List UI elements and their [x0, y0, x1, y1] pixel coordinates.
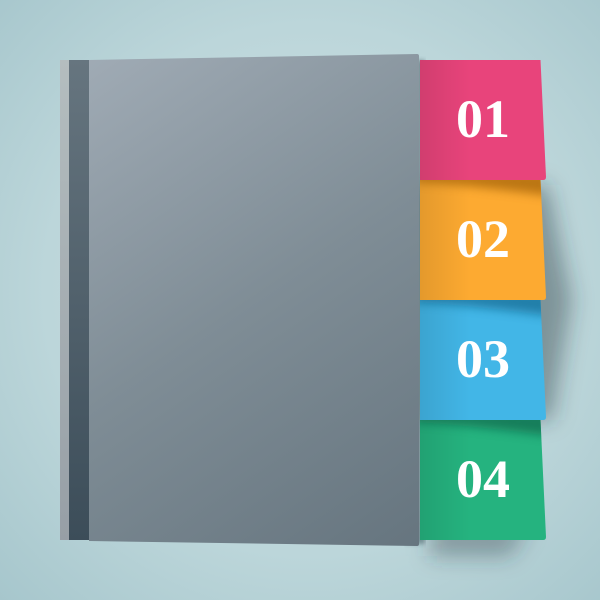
number 03: 03 — [456, 329, 510, 389]
tab 03 — [420, 300, 546, 420]
spine light strip — [60, 60, 70, 540]
number 04: 04 — [456, 449, 510, 509]
tab 04 — [420, 420, 546, 540]
tab 02 — [420, 180, 546, 300]
book — [60, 54, 419, 546]
book shadow — [405, 60, 425, 544]
tab shadows — [420, 185, 572, 556]
number 01: 01 — [456, 89, 510, 149]
spine dark strip — [69, 60, 89, 540]
book cover — [89, 54, 419, 546]
number 02: 02 — [456, 209, 510, 269]
tab 01 — [420, 60, 546, 180]
